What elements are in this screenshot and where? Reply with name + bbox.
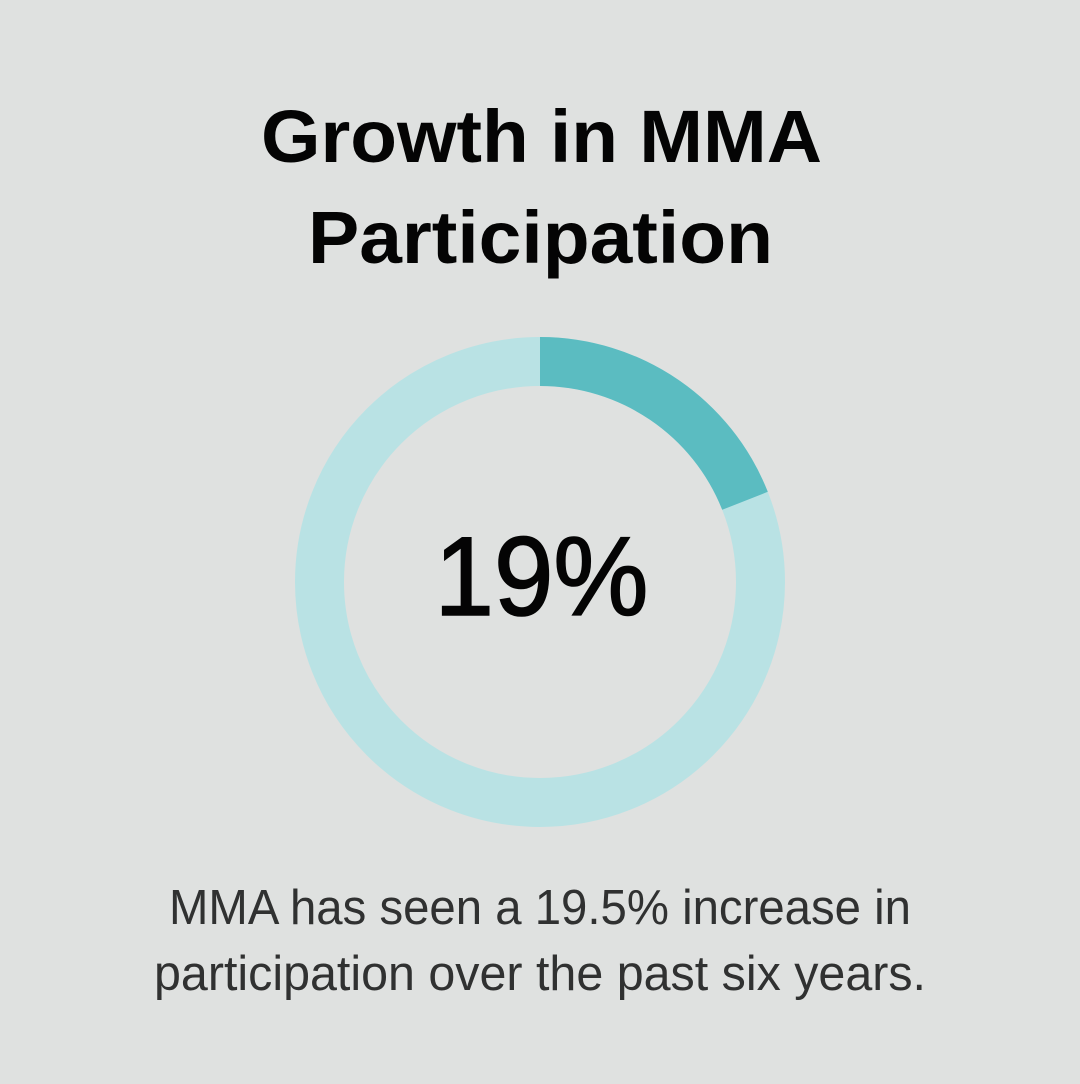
- center value: 19%: [434, 514, 648, 639]
- caption: MMA has seen a 19.5% increase in: [169, 881, 911, 935]
- caption: participation over the past six years.: [154, 947, 926, 1001]
- title: Growth in MMA: [261, 95, 822, 178]
- title: Participation: [308, 196, 773, 279]
- donut chart: 19%: [320, 337, 768, 802]
- highlighted arc segment: [540, 337, 768, 510]
- title: [261, 95, 822, 279]
- caption: [154, 881, 926, 1001]
